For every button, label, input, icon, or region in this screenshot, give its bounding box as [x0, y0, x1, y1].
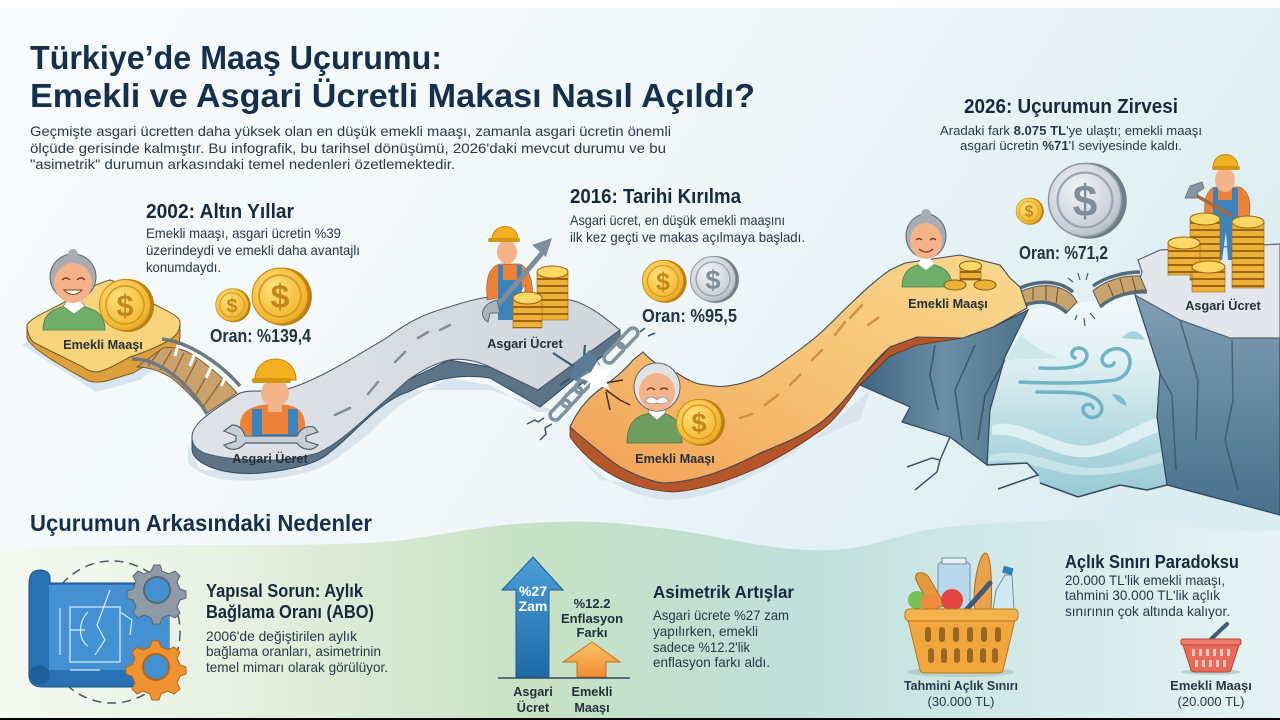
icon: blueprint with gears [29, 561, 186, 703]
icon: broken chain and crack [527, 326, 655, 440]
chart: asymmetric increase arrows: Ücret [517, 700, 550, 715]
panel: 2016 heading and text: Asgari ücret, en düşük emekli maaşını [570, 212, 785, 228]
icon: pensioner with mustache [627, 363, 682, 443]
panel: 2016 heading and text: ilk kez geçti ve makas açılmaya başladı. [570, 229, 805, 245]
panel: structural problem: bağlama oranları, asimetrinin [206, 643, 381, 659]
icon: smiling pensioner [43, 249, 105, 330]
text: hunger line paradox: tahmini 30.000 TL'lik açlık [1065, 587, 1221, 603]
orange road: emekli maaşı [566, 255, 1027, 500]
panel: structural problem [29, 561, 388, 703]
icon: full grocery basket [905, 553, 1018, 677]
text: hunger line paradox: sınırının çok altında kalıyor. [1065, 603, 1230, 619]
arrow: asgari ücret: Zam [519, 598, 547, 614]
icon: gold stacks [513, 266, 568, 328]
panel: 2026 heading and text [940, 96, 1202, 153]
text: asymmetric increases: Asimetrik Artışlar [653, 582, 794, 602]
label: (20.000 TL) [1178, 694, 1244, 709]
text: asymmetric increases: sadece %12.2'lik [653, 639, 751, 655]
chart: asymmetric increase arrows: Maaşı [574, 701, 610, 715]
panel: 2002 heading and text: 2002: Altın Yıllar [146, 201, 294, 223]
chart: asymmetric increase arrows: Asgari [513, 685, 553, 699]
label: Tahmini Açlık Sınırı [904, 678, 1018, 693]
title: Türkiye’de Maaş Uçurumu: [30, 39, 442, 76]
arrow: asgari ücret: %27 [519, 583, 547, 599]
label: Asgari Ücret [487, 336, 563, 351]
chart: asymmetric increase arrows: Emekli [572, 685, 612, 699]
panel: structural problem: temel mimarı olarak görülüyor. [206, 659, 388, 675]
right cliff [1135, 295, 1280, 515]
left cliff [860, 310, 1167, 497]
2026 coins and ratio: Oran: %71,2 [1019, 243, 1108, 263]
2002 coins and ratio [210, 268, 312, 346]
text: asymmetric increases: yapılırken, emekli [653, 623, 758, 639]
icon: worker with wrench [224, 359, 318, 449]
title [30, 39, 755, 114]
arrow: emekli maaşı [561, 596, 623, 677]
panel: 2002 heading and text: konumdaydı. [146, 259, 221, 275]
gray road: asgari ücret [188, 297, 620, 481]
chasm with mist and water [987, 295, 1167, 497]
icon: small empty basket [1181, 624, 1241, 675]
2026 coins and ratio [1016, 163, 1127, 263]
panel: structural problem: Bağlama Oranı (ABO) [206, 602, 374, 622]
label: Emekli Maaşı [908, 297, 988, 311]
text: asymmetric increases [653, 582, 794, 670]
intro text: ölçüde gerisinde kalmıştır. Bu infografik, bu tarihsel dönüşümü, 2026'daki mevcut durumu ve bu [30, 140, 666, 156]
panel: 2002 heading and text: üzerindeydi ve emekli daha avantajlı [146, 242, 360, 258]
panel: 2026 heading and text: asgari ücretin %71'I seviyesinde kaldı. [960, 138, 1182, 153]
intro text [30, 123, 671, 172]
label: Asgari Üeret [232, 451, 308, 466]
2002 coins and ratio: Oran: %139,4 [210, 326, 311, 346]
label: Asgari Ücret [1185, 298, 1261, 313]
background wave band [0, 520, 1280, 718]
icon: pensioner on plateau [902, 209, 952, 287]
panel: 2026 heading and text: Aradaki fark 8.075 TL'ye ulaştı; emekli maaşı [940, 123, 1202, 138]
text: hunger line paradox: Açlık Sınırı Paradoksu [1065, 552, 1239, 572]
label [1170, 678, 1252, 709]
panel: 2002 heading and text [146, 201, 360, 275]
label: Emekli Maaşı [635, 452, 715, 466]
panel: 2002 heading and text: Emekli maaşı, asgari ücretin %39 [146, 225, 341, 241]
text: hunger line paradox: 20.000 TL'lik emekli maaşı, [1065, 572, 1225, 588]
chart: asymmetric increase arrows [498, 557, 630, 715]
icon: gold coin [676, 399, 725, 446]
panel: 2016 heading and text: 2016: Tarihi Kırılma [570, 186, 742, 208]
icon: gold stacks [1168, 213, 1264, 292]
2016 coins and ratio [642, 256, 739, 326]
panel: structural problem: 2006'de değiştirilen aylık [206, 628, 358, 644]
arrow: asgari ücret [502, 557, 563, 677]
intro text: "asimetrik" durumun arkasındaki temel nedenleri özetlemektedir. [30, 156, 455, 172]
title: Emekli ve Asgari Ücretli Makası Nasıl Açıldı? [30, 77, 755, 114]
section heading: Uçurumun Arkasındaki Nedenler [30, 510, 372, 536]
2002 island: emekli maaşı [22, 249, 180, 392]
text: asymmetric increases: Asgari ücrete %27 zam [653, 607, 789, 623]
text: hunger line paradox [1065, 552, 1239, 619]
right plateau: asgari ücret [1135, 244, 1280, 338]
panel: 2016 heading and text [570, 186, 805, 245]
icon: worker with arrow wrench [482, 226, 552, 322]
icon: wooden bridge [132, 339, 240, 414]
arrow: emekli maaşı: %12.2 [574, 596, 610, 611]
label: (30.000 TL) [928, 694, 994, 709]
text: asymmetric increases: enflasyon farkı aldı. [653, 654, 770, 670]
label: Emekli Maaşı [1170, 678, 1252, 693]
label: Emekli Maaşı [63, 338, 143, 352]
label [904, 678, 1018, 709]
icon: gold coin [100, 279, 154, 332]
icon: worker with hammer [1185, 154, 1250, 260]
arrow: emekli maaşı: Farkı [576, 625, 608, 640]
icon: pile of coins [944, 261, 996, 290]
arrow: emekli maaşı: Enflasyon [561, 611, 623, 626]
intro text: Geçmişte asgari ücretten daha yüksek olan en düşük emekli maaşı, zamanla asgari ücretin önemli [30, 123, 671, 139]
2016 coins and ratio: Oran: %95,5 [642, 306, 737, 326]
icon: broken bridge [1020, 272, 1147, 326]
panel: 2026 heading and text: 2026: Uçurumun Zirvesi [964, 96, 1178, 118]
panel: structural problem: Yapısal Sorun: Aylık [206, 581, 364, 601]
icon: wind swirls [1020, 348, 1130, 417]
